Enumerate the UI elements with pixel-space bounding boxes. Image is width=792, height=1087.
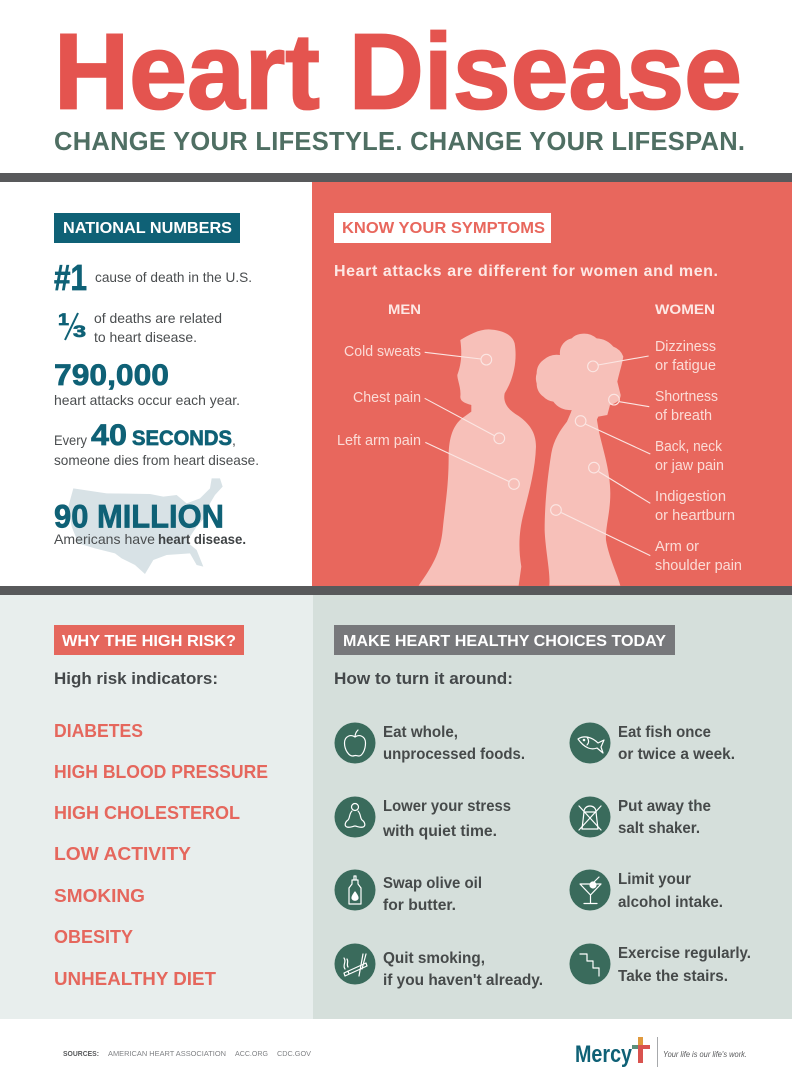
tip: quit smoking: Quit smoking, xyxy=(383,950,485,967)
risk list xyxy=(54,720,268,989)
tip: quiet time xyxy=(334,796,511,840)
symptoms: women: Shortness xyxy=(655,389,718,405)
footer xyxy=(63,1037,747,1068)
sources: CDC.GOV xyxy=(277,1049,311,1058)
subtitle: CHANGE YOUR LIFESTYLE. CHANGE YOUR LIFESPAN. xyxy=(54,128,745,156)
symptoms: men: Left arm pain xyxy=(337,433,421,449)
logo: Mercy: Your life is our life's work. xyxy=(663,1050,747,1059)
tip: quit smoking: if you haven't already. xyxy=(383,972,543,989)
stat: 90 million: Americans have xyxy=(54,531,155,547)
silhouette: man xyxy=(419,329,536,586)
tip: quit smoking xyxy=(334,944,543,989)
stat: every 40 seconds: Every xyxy=(54,432,87,448)
heading: why the high risk xyxy=(54,625,244,655)
tip: limit alcohol: Limit your xyxy=(618,871,691,888)
risk list: UNHEALTHY DIET xyxy=(54,968,217,989)
tip: salt shaker xyxy=(570,796,711,838)
tip: exercise xyxy=(570,944,751,985)
heading: why the high risk: WHY THE HIGH RISK? xyxy=(62,633,236,650)
sources: SOURCES: xyxy=(63,1049,99,1058)
tip: whole foods: Eat whole, xyxy=(383,724,458,741)
symptoms: women: shoulder pain xyxy=(655,558,742,574)
tip: eat fish xyxy=(570,722,735,764)
panel: national numbers xyxy=(0,182,312,586)
stat: every 40 seconds: someone dies from heart disease. xyxy=(54,452,259,468)
symptoms intro: Heart attacks are different for women and men. xyxy=(334,263,718,280)
logo: Mercy xyxy=(575,1037,747,1068)
panel: why the high risk xyxy=(0,595,313,1019)
risk list: LOW ACTIVITY xyxy=(54,843,192,864)
heading: make heart healthy choices today: MAKE HEART HEALTHY CHOICES TODAY xyxy=(343,633,666,650)
tip: exercise: Exercise regularly. xyxy=(618,945,751,962)
stat: number one cause xyxy=(54,257,252,298)
stat: 90 million xyxy=(54,498,246,547)
stat: 790,000 heart attacks: 790,000 xyxy=(54,359,169,392)
heading: know your symptoms xyxy=(334,213,551,243)
tip: exercise: Take the stairs. xyxy=(618,968,728,985)
risk list: DIABETES xyxy=(54,720,143,741)
risk list: OBESITY xyxy=(54,926,134,947)
stat: 90 million: 90 MILLION xyxy=(54,498,224,534)
stat: one third of deaths xyxy=(58,310,222,345)
stat: 790,000 heart attacks xyxy=(54,359,240,408)
stat: one third of deaths: of deaths are related xyxy=(94,310,222,326)
stat: one third of deaths: 3 xyxy=(73,322,86,341)
symptoms: women: or fatigue xyxy=(655,358,716,374)
choices intro: How to turn it around: xyxy=(334,669,513,688)
stat: every 40 seconds: 40 xyxy=(91,419,127,452)
panel: know your symptoms xyxy=(312,182,792,586)
tip: eat fish: Eat fish once xyxy=(618,724,711,741)
symptoms: men: Cold sweats xyxy=(344,344,421,360)
tip: quiet time: Lower your stress xyxy=(383,798,511,815)
stat: one third of deaths: 1 xyxy=(58,310,69,329)
panel: heart healthy choices xyxy=(313,595,792,1019)
risk intro: High risk indicators: xyxy=(54,669,218,688)
tip: whole foods xyxy=(334,722,525,764)
symptom markers xyxy=(425,352,650,556)
stat: number one cause: cause of death in the U.S. xyxy=(95,269,252,285)
stat: 790,000 heart attacks: heart attacks occur each year. xyxy=(54,392,240,408)
tip: limit alcohol xyxy=(570,870,723,911)
symptoms: women: Dizziness xyxy=(655,339,716,355)
heading: make heart healthy choices today xyxy=(334,625,675,655)
stat: 90 million: heart disease. xyxy=(158,531,246,547)
stat: every 40 seconds: SECONDS xyxy=(132,427,232,450)
logo: Mercy: Mercy xyxy=(575,1041,633,1068)
label: women: WOMEN xyxy=(655,301,715,317)
symptoms: men xyxy=(337,344,421,449)
header xyxy=(54,10,745,156)
sources: ACC.ORG xyxy=(235,1049,268,1058)
map: United States xyxy=(68,478,223,574)
risk list: SMOKING xyxy=(54,885,145,906)
symptoms: women xyxy=(655,339,742,574)
silhouette: woman xyxy=(536,334,623,586)
symptoms: women: or heartburn xyxy=(655,508,735,524)
heading: national numbers: NATIONAL NUMBERS xyxy=(63,220,232,237)
tip: salt shaker: Put away the xyxy=(618,798,711,815)
symptoms: men: Chest pain xyxy=(353,390,421,406)
tip: eat fish: or twice a week. xyxy=(618,746,735,763)
title: Heart Disease xyxy=(54,10,742,132)
tip: whole foods: unprocessed foods. xyxy=(383,746,525,763)
tip: olive oil: Swap olive oil xyxy=(383,875,482,892)
tip: salt shaker: salt shaker. xyxy=(618,820,700,837)
symptoms: women: Indigestion xyxy=(655,489,726,505)
heading: know your symptoms: KNOW YOUR SYMPTOMS xyxy=(342,220,545,237)
tip: olive oil: for butter. xyxy=(383,897,456,914)
symptoms: women: or jaw pain xyxy=(655,458,724,474)
tip: olive oil xyxy=(334,870,482,914)
label: men: MEN xyxy=(388,301,421,317)
stat: one third of deaths: to heart disease. xyxy=(94,329,197,345)
stat: number one cause: #1 xyxy=(54,257,87,298)
symptoms: women: Arm or xyxy=(655,539,699,555)
tip: quiet time: with quiet time. xyxy=(382,823,497,840)
risk list: HIGH BLOOD PRESSURE xyxy=(54,761,268,782)
tip: limit alcohol: alcohol intake. xyxy=(618,894,723,911)
sources xyxy=(63,1049,311,1058)
symptoms: women: Back, neck xyxy=(655,439,723,455)
heading: national numbers xyxy=(54,213,240,243)
sources: AMERICAN HEART ASSOCIATION xyxy=(108,1049,226,1058)
risk list: HIGH CHOLESTEROL xyxy=(54,802,240,823)
stat: every 40 seconds: , xyxy=(232,432,236,448)
stat: every 40 seconds xyxy=(54,419,259,468)
symptoms: women: of breath xyxy=(655,408,712,424)
